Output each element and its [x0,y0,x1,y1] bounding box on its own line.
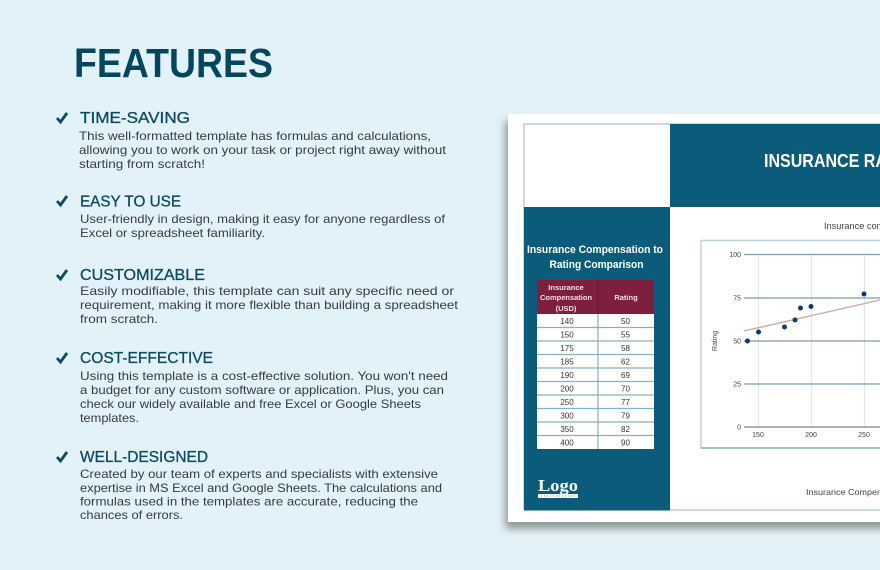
text: easy to use description: Excel or spreadsheet familiarity. [80,226,265,240]
text: well-designed description [80,467,442,522]
x axis labels: 150 [752,432,764,439]
text: customizable description: from scratch. [80,312,158,326]
y axis title: Rating [712,331,719,351]
feature: well-designed [57,449,442,522]
table: Compensation [540,293,592,302]
heading: cost-effective: COST-EFFECTIVE [80,350,213,367]
text: well-designed description: expertise in MS Excel and Google Sheets. The calculations and [80,481,442,495]
table: 140 [560,317,574,326]
table title: Insurance Compensation to [527,244,663,256]
data points [745,292,866,344]
heading: well-designed: WELL-DESIGNED [80,449,208,466]
table: 90 [621,438,630,448]
table: 190 [560,371,574,380]
y axis labels: 75 [733,296,741,302]
feature: customizable [57,267,459,326]
table [537,280,654,449]
table: (USD) [556,304,577,313]
heading: time-saving: TIME-SAVING [80,110,190,127]
x axis labels: 200 [805,432,817,439]
icon: check mark [57,113,67,122]
text: time-saving description [79,129,447,171]
icon: check mark [57,353,67,362]
table title [527,244,663,271]
spreadsheet preview [505,114,880,529]
text: cost-effective description: templates. [80,411,139,425]
text: well-designed description: Created by our team of experts and specialists with extensive [80,467,438,481]
text: easy to use description: User-friendly in design, making it easy for anyone regardless of [80,212,446,226]
heading: easy to use: EASY TO USE [80,194,181,210]
table: 58 [621,344,630,353]
y axis labels: 100 [729,252,741,259]
table: 150 [560,330,574,340]
panel: data table [524,207,670,510]
table: 200 [560,384,574,394]
icon: check mark [57,270,67,279]
table: 69 [621,371,630,380]
text: well-designed description: chances of errors. [80,508,183,522]
feature: cost-effective [57,350,448,425]
x axis labels: 250 [858,432,870,439]
text: cost-effective description [80,369,448,425]
table: 175 [560,344,574,353]
table: 62 [621,358,630,366]
table: 400 [560,438,574,448]
table: 50 [621,317,630,326]
table: 82 [621,425,630,434]
text: customizable description: requirement, making it more flexible than building a spreadsheet [80,298,459,312]
table: 350 [560,425,574,434]
table: 250 [560,398,574,407]
text: cost-effective description: a budget for any custom software or application. Plus, you can [80,383,444,397]
logo: Logo [538,476,578,495]
text: customizable description [80,284,459,326]
table: Rating [614,293,638,302]
scatter chart [701,240,880,448]
x axis labels [752,432,870,439]
table: 55 [621,330,630,340]
y axis labels: 50 [733,338,741,346]
text: time-saving description: starting from scratch! [79,157,205,171]
text: cost-effective description: Using this template is a cost-effective solution. You won't need [80,369,448,383]
title: FEATURES [74,40,273,86]
feature: easy to use [57,194,446,240]
text: time-saving description: allowing you to work on your task or project right away without [79,143,447,157]
feature: time-saving [57,110,447,171]
icon: check mark [57,452,67,461]
y axis labels: 25 [733,382,741,388]
table: 79 [621,412,630,420]
text: well-designed description: formulas used in the templates are accurate, reducing the [80,494,418,508]
table: Insurance [548,283,584,292]
text: cost-effective description: check our widely available and free Excel or Google Sheets [80,397,421,411]
header banner [670,124,880,207]
table: 77 [621,398,630,407]
table: 70 [621,384,630,394]
table: 300 [560,412,574,420]
table title: Rating Comparison [550,259,644,271]
text: time-saving description: This well-formatted template has formulas and calculations, [79,129,431,143]
icon: check mark [57,196,67,205]
text: customizable description: Easily modifiable, this template can suit any specific need or [80,284,454,298]
y axis labels: 0 [737,424,741,432]
table: 185 [560,358,574,366]
y axis labels [729,252,741,432]
text: easy to use description [80,212,446,240]
heading: customizable: CUSTOMIZABLE [80,267,205,284]
